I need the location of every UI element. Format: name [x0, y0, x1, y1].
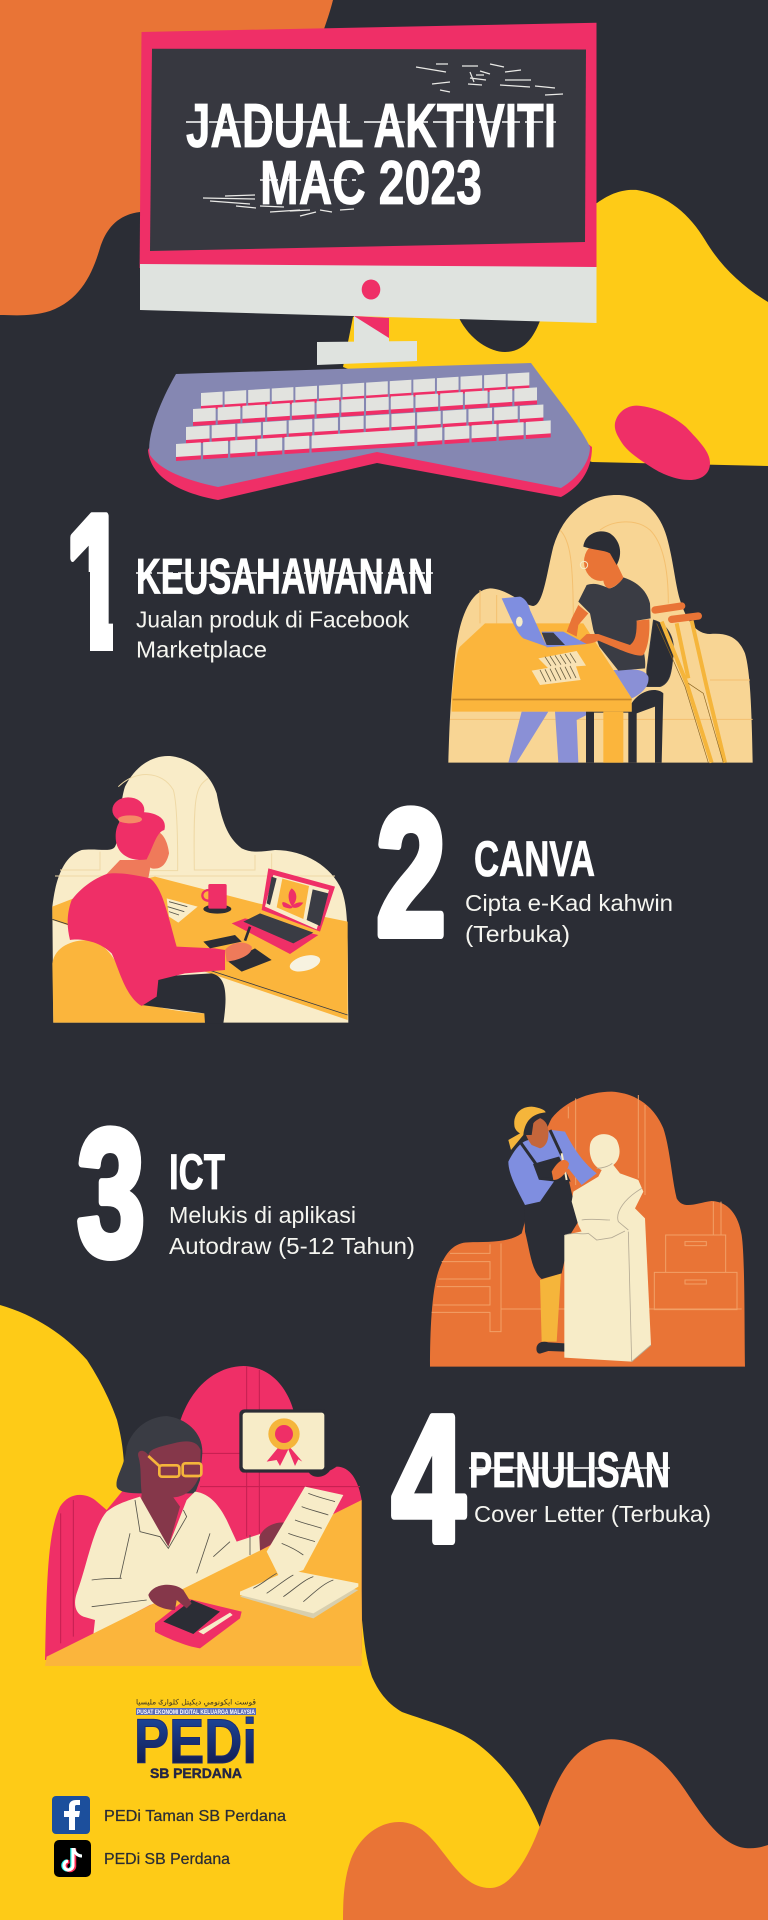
item 4: heading: PENULISAN [469, 1442, 670, 1498]
keypad [203, 935, 242, 948]
logo: PEDi SB Perdana: PUSAT EKONOMI DIGITAL KELUARGA MALAYSIA [137, 1709, 255, 1716]
desk [52, 877, 348, 1020]
chair back [647, 620, 674, 687]
hair [116, 1416, 202, 1493]
item 3: description: Autodraw (5-12 Tahun) [169, 1233, 415, 1259]
keyboard keys [176, 372, 551, 461]
glasses [148, 1456, 201, 1477]
icon: tiktok [54, 1840, 91, 1877]
jeans [508, 712, 593, 763]
blob: yellow right [343, 190, 768, 466]
item 4: number: 4 [392, 1379, 465, 1580]
backdrop blob [430, 1092, 745, 1367]
backdrop blob [448, 495, 753, 763]
monitor screen [150, 49, 586, 251]
thigh [613, 669, 649, 698]
paper [267, 1487, 343, 1578]
stack of paper [240, 1570, 358, 1618]
logo: PEDi SB Perdana [134, 1698, 257, 1781]
face [584, 542, 617, 581]
item 2: number: 2 [376, 773, 446, 974]
stool [586, 690, 663, 763]
calculator [155, 1598, 242, 1648]
illustration 3: sculptor with statue [430, 1092, 745, 1367]
logo word: PEDi [134, 1707, 257, 1777]
icon: keyboard [148, 363, 592, 500]
mug [202, 884, 231, 914]
sweater [68, 873, 225, 1006]
item 3: description: Melukis di aplikasi [169, 1202, 356, 1228]
statue [572, 1134, 645, 1240]
notch in yellow blob [459, 318, 541, 352]
blob: orange bottom right [343, 1739, 768, 1920]
icon: desktop computer monitor [140, 23, 596, 365]
illustration 2: woman drawing on tablet [52, 756, 348, 1023]
neck [107, 860, 152, 878]
face [138, 830, 169, 869]
item 2: description: Cipta e-Kad kahwin [465, 890, 673, 916]
illustration 4: woman with calculator and documents [45, 1366, 362, 1666]
facebook label: PEDi Taman SB Perdana [104, 1808, 286, 1825]
hair [583, 531, 620, 565]
logo band [136, 1708, 256, 1715]
item 3: number: 3 [77, 1093, 145, 1294]
monitor stand [317, 316, 417, 365]
hand on calculator [148, 1585, 192, 1610]
monitor frame [140, 23, 596, 270]
laptop [502, 597, 547, 647]
item 1: description: Marketplace [136, 636, 267, 662]
paper [167, 898, 198, 923]
keyboard body [149, 363, 590, 488]
keyboard pink underside [148, 400, 592, 500]
face and neck [138, 1441, 201, 1547]
shirt [508, 1130, 597, 1205]
blob: yellow bottom left [0, 1305, 541, 1920]
bun [112, 797, 144, 823]
chair [52, 940, 205, 1023]
item 3: description [169, 1202, 415, 1259]
scratch texture [203, 64, 563, 216]
table [452, 623, 632, 712]
power button [362, 280, 380, 300]
item 4: description: Cover Letter (Terbuka) [474, 1501, 711, 1527]
illustration 1: person at laptop with crutches [448, 495, 753, 763]
crutches [662, 621, 725, 763]
head [525, 1117, 548, 1148]
title [186, 92, 556, 218]
hand and chisel [562, 1153, 567, 1180]
neck [600, 557, 623, 588]
pedestal [564, 1218, 651, 1362]
hair [116, 812, 165, 860]
certificate [239, 1409, 330, 1477]
title: JADUAL AKTIVITI [186, 92, 556, 161]
item 1: heading: KEUSAHAWANAN [136, 548, 433, 604]
tablet [228, 948, 272, 972]
apron bib [520, 1130, 568, 1180]
pink backdrop [45, 1366, 362, 1660]
papers [532, 651, 586, 685]
item 1: number: 1 [65, 476, 127, 688]
backdrop blob [52, 756, 348, 1023]
arms [567, 605, 649, 656]
hand holding paper [259, 1522, 288, 1551]
apron [524, 1178, 578, 1279]
shirt [578, 577, 651, 671]
icon: mouse [615, 406, 710, 480]
tiktok label: PEDi SB Perdana [104, 1851, 230, 1868]
logo jawi line: ڤوست ايکونومي ديکيتل کلوارݢ مليسيا [136, 1698, 256, 1706]
item 2: heading: CANVA [474, 831, 595, 887]
item 1: description [136, 606, 409, 662]
shoe [536, 1342, 565, 1354]
blob: orange top left [0, 0, 333, 315]
crutch grips [655, 606, 698, 619]
headscarf [508, 1107, 546, 1150]
glasses [580, 561, 588, 569]
item 3: heading: ICT [169, 1144, 225, 1200]
shirt [75, 1492, 260, 1635]
item 1: description: Jualan produk di Facebook [136, 606, 409, 632]
scrunchie [118, 815, 142, 823]
mouse [288, 952, 322, 974]
laptop [232, 868, 335, 954]
item 2: description [465, 890, 673, 947]
trousers [540, 1273, 561, 1342]
title: MAC 2023 [260, 149, 482, 218]
desk [45, 1500, 362, 1666]
item 2: description: (Terbuka) [465, 921, 570, 947]
trousers [142, 973, 226, 1023]
logo subtitle: SB PERDANA [150, 1765, 242, 1781]
monitor chin [140, 264, 596, 323]
icon: facebook [52, 1796, 90, 1834]
hand and pen [245, 927, 250, 941]
